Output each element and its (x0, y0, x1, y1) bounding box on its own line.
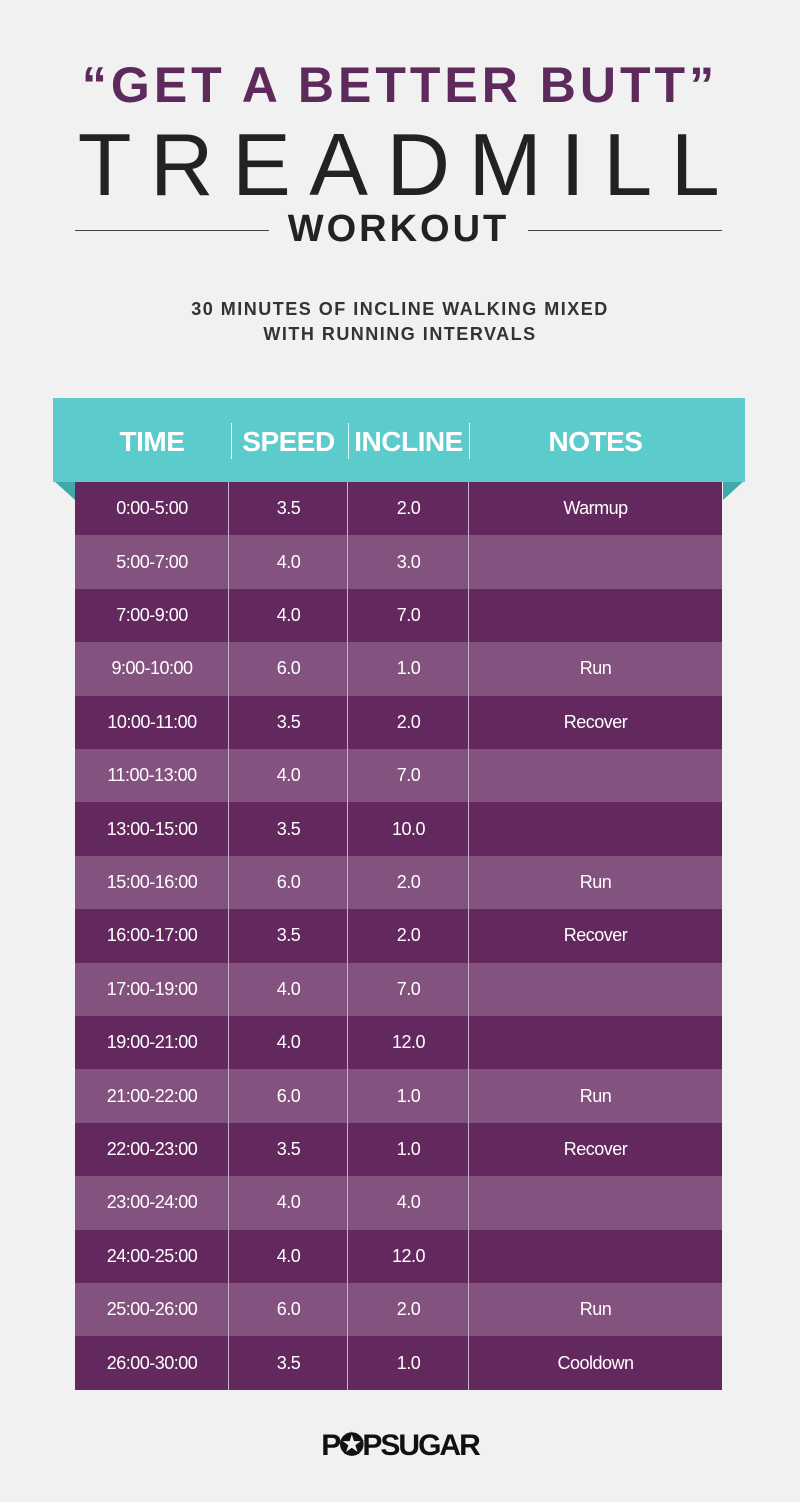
table body: 13:00-15:00 (107, 819, 197, 839)
table body: 7.0 (397, 979, 420, 999)
table body: 10:00-11:00 (107, 712, 197, 732)
table body: 1.0 (397, 1086, 420, 1106)
table body: 7.0 (397, 765, 420, 785)
table body: 6.0 (277, 1086, 300, 1106)
table body: Run (580, 1299, 611, 1319)
table body: 7.0 (397, 605, 420, 625)
table body: Run (580, 872, 611, 892)
table header: TIME (120, 426, 184, 457)
table body: 1.0 (397, 1353, 420, 1373)
table header (53, 398, 745, 482)
table body: 21:00-22:00 (107, 1086, 197, 1106)
table body: 24:00-25:00 (107, 1246, 197, 1266)
table header: SPEED (242, 426, 335, 457)
table body: Recover (564, 1139, 627, 1159)
table body: 12.0 (392, 1032, 425, 1052)
table body: 4.0 (277, 1032, 300, 1052)
logo: popsugar: P✪PSUGAR (321, 1429, 479, 1462)
table body: 6.0 (277, 658, 300, 678)
table body: Run (580, 658, 611, 678)
table body: 19:00-21:00 (107, 1032, 197, 1052)
table body: 25:00-26:00 (107, 1299, 197, 1319)
table body: 4.0 (277, 552, 300, 572)
table body (75, 482, 722, 1390)
table body: 7:00-9:00 (116, 605, 188, 625)
table body: 4.0 (397, 1192, 420, 1212)
table body: 2.0 (397, 872, 420, 892)
table header: INCLINE (354, 426, 463, 457)
table body: 4.0 (277, 979, 300, 999)
subtitle: WITH RUNNING INTERVALS (263, 324, 537, 344)
table body: 0:00-5:00 (116, 498, 188, 518)
table body: 1.0 (397, 658, 420, 678)
table body: 2.0 (397, 925, 420, 945)
table body: Warmup (563, 498, 628, 518)
table body: 6.0 (277, 1299, 300, 1319)
subtitle (191, 299, 609, 344)
table body: 2.0 (397, 1299, 420, 1319)
table body: 4.0 (277, 765, 300, 785)
table body: 2.0 (397, 712, 420, 732)
table body: 3.5 (277, 819, 300, 839)
table body: 6.0 (277, 872, 300, 892)
table body: 23:00-24:00 (107, 1192, 197, 1212)
table body: Recover (564, 925, 627, 945)
table body: 11:00-13:00 (107, 765, 197, 785)
table header fold (55, 482, 743, 500)
table body: 9:00-10:00 (111, 658, 193, 678)
table body: 17:00-19:00 (107, 979, 197, 999)
table body: Recover (564, 712, 627, 732)
table body: 22:00-23:00 (107, 1139, 197, 1159)
table body: 16:00-17:00 (107, 925, 197, 945)
table body: 15:00-16:00 (107, 872, 197, 892)
table body: 12.0 (392, 1246, 425, 1266)
table body: 3.5 (277, 712, 300, 732)
table body: 3.5 (277, 1353, 300, 1373)
table body: 4.0 (277, 605, 300, 625)
table body: 4.0 (277, 1246, 300, 1266)
title line 3: WORKOUT (288, 208, 509, 250)
table header: NOTES (549, 426, 642, 457)
table body: 4.0 (277, 1192, 300, 1212)
table body: 3.5 (277, 498, 300, 518)
table body: 5:00-7:00 (116, 552, 188, 572)
table body: 3.0 (397, 552, 420, 572)
table body: 3.5 (277, 925, 300, 945)
table body: Run (580, 1086, 611, 1106)
title line 1: “GET A BETTER BUTT” (82, 57, 718, 113)
subtitle: 30 MINUTES OF INCLINE WALKING MIXED (191, 299, 609, 319)
title line 2: TREADMILL (78, 115, 738, 214)
table body: 26:00-30:00 (107, 1353, 197, 1373)
table body: Cooldown (557, 1353, 634, 1373)
table body: 3.5 (277, 1139, 300, 1159)
table body: 2.0 (397, 498, 420, 518)
table body: 1.0 (397, 1139, 420, 1159)
table body: 10.0 (392, 819, 425, 839)
